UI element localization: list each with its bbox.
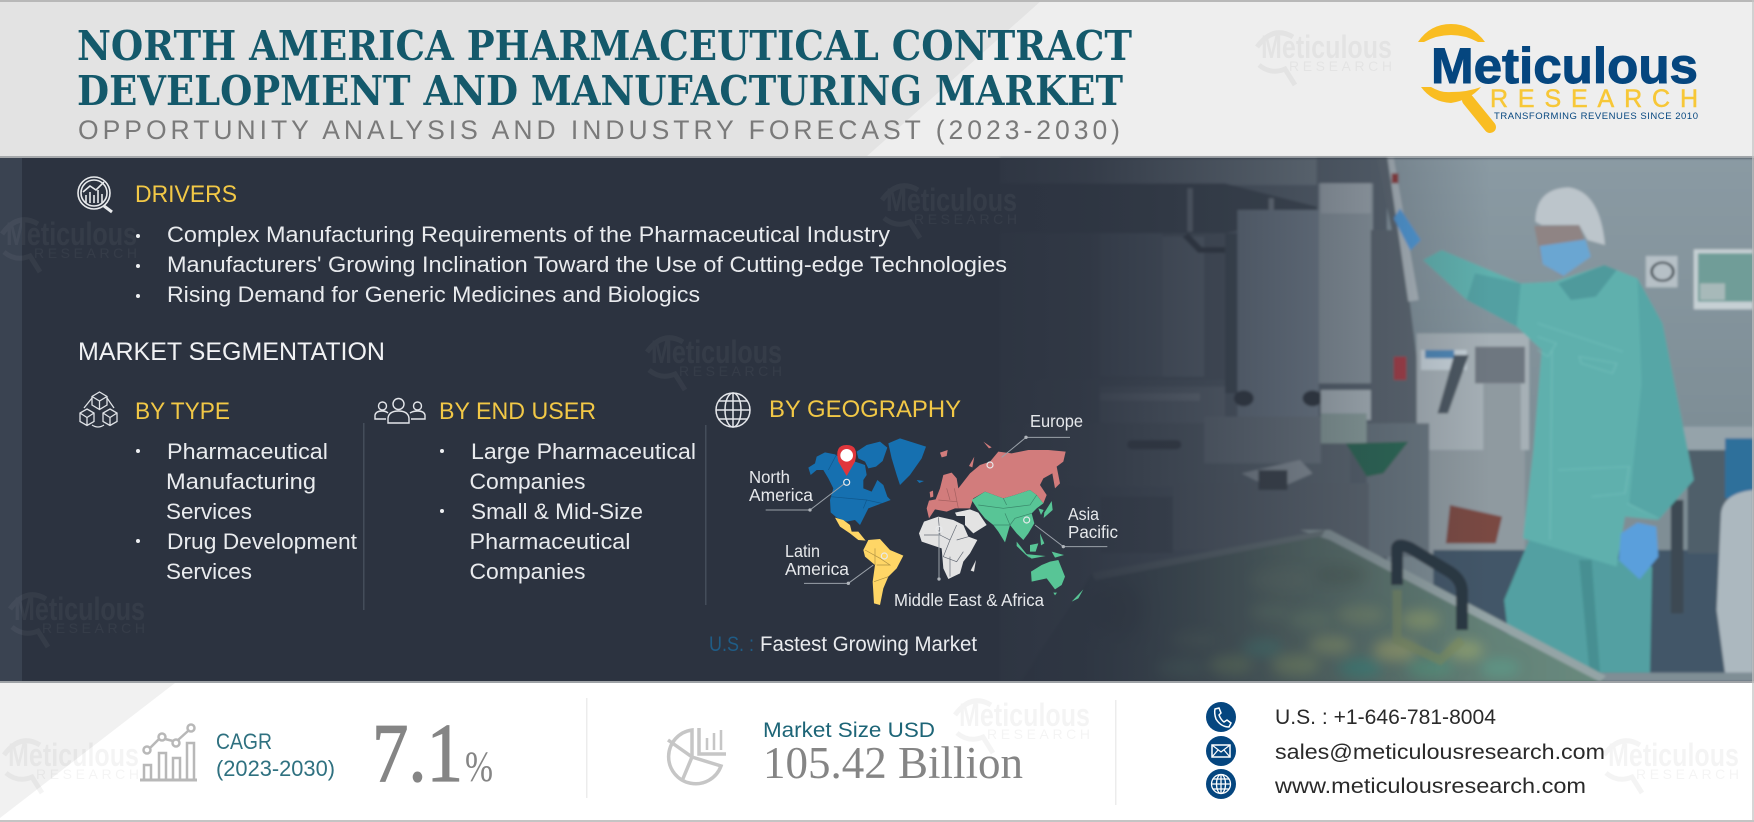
icon: people xyxy=(375,398,425,423)
label: CAGR period xyxy=(216,729,335,781)
title: NORTH AMERICA PHARMACEUTICAL CONTRACT xyxy=(77,22,1132,70)
map labels: America xyxy=(785,559,849,579)
watermarks: Meticulous xyxy=(651,334,782,370)
type list xyxy=(136,439,357,584)
end user list xyxy=(440,439,696,584)
hairnet, face, mask xyxy=(1535,187,1605,245)
map labels: America xyxy=(749,485,813,505)
type list: Services xyxy=(166,559,252,584)
end user list: Companies xyxy=(470,559,586,584)
value: 7.1%: 7.1 xyxy=(372,707,463,800)
fastest growing callout: U.S. : xyxy=(709,633,754,656)
leader lines xyxy=(766,437,1107,583)
title xyxy=(77,22,1132,115)
heading: market segmentation: MARKET SEGMENTATION xyxy=(78,338,385,366)
panel: contact details xyxy=(1206,702,1605,799)
end user list: Pharmaceutical xyxy=(470,529,630,554)
left fade over photo xyxy=(950,158,1490,682)
driver list xyxy=(136,222,1007,307)
text: email: sales@meticulousresearch.com xyxy=(1275,741,1605,764)
photo: cleanroom operator xyxy=(1000,158,1754,682)
region: north america xyxy=(808,438,926,525)
icon: pie chart xyxy=(668,728,726,784)
region: middle east and africa xyxy=(919,517,977,579)
world map xyxy=(766,436,1107,605)
map labels: North xyxy=(749,467,790,487)
label: CAGR period: CAGR xyxy=(216,729,272,754)
watermarks: footer: Meticulous xyxy=(8,737,139,773)
watermarks: Meticulous xyxy=(14,591,145,627)
panel: by end user xyxy=(375,398,696,584)
watermarks: Meticulous xyxy=(1261,29,1392,65)
stat: market size xyxy=(668,719,1023,788)
watermarks: footer: RESEARCH xyxy=(987,726,1090,742)
text: website: www.meticulousresearch.com xyxy=(1274,775,1586,798)
panel: drivers xyxy=(78,177,1007,307)
driver list: Manufacturers' Growing Inclination Toward the Use of Cutting-edge Technologies xyxy=(167,252,1007,277)
end user list: Companies xyxy=(470,469,586,494)
logo: Meticulous Research xyxy=(1418,24,1698,127)
watermarks: RESEARCH xyxy=(1289,58,1392,74)
divider xyxy=(363,423,364,610)
map labels: Latin xyxy=(785,541,820,561)
map labels: Asia xyxy=(1068,504,1099,524)
divider xyxy=(705,425,706,605)
region: middle east xyxy=(955,509,987,533)
type list: Drug Development xyxy=(167,529,357,554)
driver list: Complex Manufacturing Requirements of the Pharmaceutical Industry xyxy=(167,222,890,247)
icon: location pin xyxy=(837,445,856,476)
watermarks: RESEARCH xyxy=(34,245,137,261)
watermarks: Meticulous xyxy=(886,182,1017,218)
map labels: Pacific xyxy=(1068,522,1118,542)
icon: email xyxy=(1206,736,1236,766)
heading: by geography: BY GEOGRAPHY xyxy=(769,396,961,423)
text: phone: U.S. : +1-646-781-8004 xyxy=(1275,706,1496,729)
subtitle: OPPORTUNITY ANALYSIS AND INDUSTRY FORECAST (2023-2030) xyxy=(78,115,1120,145)
value: 7.1%: % xyxy=(465,744,493,791)
clock and poster on wall xyxy=(1646,256,1678,287)
icon: website xyxy=(1206,769,1236,799)
type list: Services xyxy=(166,499,252,524)
icon: phone xyxy=(1206,702,1236,732)
icon: globe xyxy=(716,393,750,427)
region: latin america xyxy=(835,518,903,605)
panel: dark photo background xyxy=(0,158,1754,682)
heading: drivers: DRIVERS xyxy=(135,181,237,208)
fastest growing callout: Fastest Growing Market xyxy=(760,633,977,656)
panel: by geography xyxy=(709,393,1118,656)
region: asia pacific xyxy=(972,490,1083,602)
watermarks: footer: RESEARCH xyxy=(36,766,139,782)
icon: cubes xyxy=(80,392,117,427)
map labels: Europe xyxy=(1030,411,1083,431)
icon: growth chart xyxy=(140,724,197,780)
watermarks: footer: Meticulous xyxy=(959,697,1090,733)
type list: Manufacturing xyxy=(166,469,316,494)
label: CAGR period: (2023-2030) xyxy=(216,756,335,781)
driver list: Rising Demand for Generic Medicines and Biologics xyxy=(167,282,700,307)
gloves xyxy=(1394,208,1421,251)
type list: Pharmaceutical xyxy=(167,439,328,464)
watermarks: RESEARCH xyxy=(42,620,145,636)
end user list: Large Pharmaceutical xyxy=(471,439,696,464)
watermarks: Meticulous xyxy=(6,216,137,252)
heading: by type: BY TYPE xyxy=(135,398,230,425)
map labels: Middle East & Africa xyxy=(894,590,1044,610)
stat: CAGR xyxy=(140,707,493,800)
value: 105.42 billion: 105.42 Billion xyxy=(763,738,1023,788)
logo: Meticulous Research: Meticulous xyxy=(1431,38,1698,94)
watermarks: RESEARCH xyxy=(679,363,782,379)
map labels xyxy=(749,411,1118,610)
panel: header band xyxy=(0,0,1754,158)
label: market size USD: Market Size USD xyxy=(763,719,935,742)
logo: Meticulous Research: TRANSFORMING REVENUES SINCE 2010 xyxy=(1494,111,1698,122)
watermarks: footer xyxy=(4,697,1739,793)
end user list: Small & Mid-Size xyxy=(471,499,643,524)
panel: by type xyxy=(80,392,357,584)
watermarks: RESEARCH xyxy=(914,211,1017,227)
region: europe and russia xyxy=(927,442,1066,518)
glass tank xyxy=(1020,530,1606,682)
logo: Meticulous Research: RESEARCH xyxy=(1490,85,1698,113)
icon: magnifier with chart xyxy=(78,177,112,212)
watermarks xyxy=(2,29,1392,647)
trousers xyxy=(1504,540,1652,673)
heading: by end user: BY END USER xyxy=(439,398,596,425)
watermarks: footer: RESEARCH xyxy=(1636,766,1739,782)
coat xyxy=(1423,250,1694,567)
title: DEVELOPMENT AND MANUFACTURING MARKET xyxy=(77,67,1123,115)
